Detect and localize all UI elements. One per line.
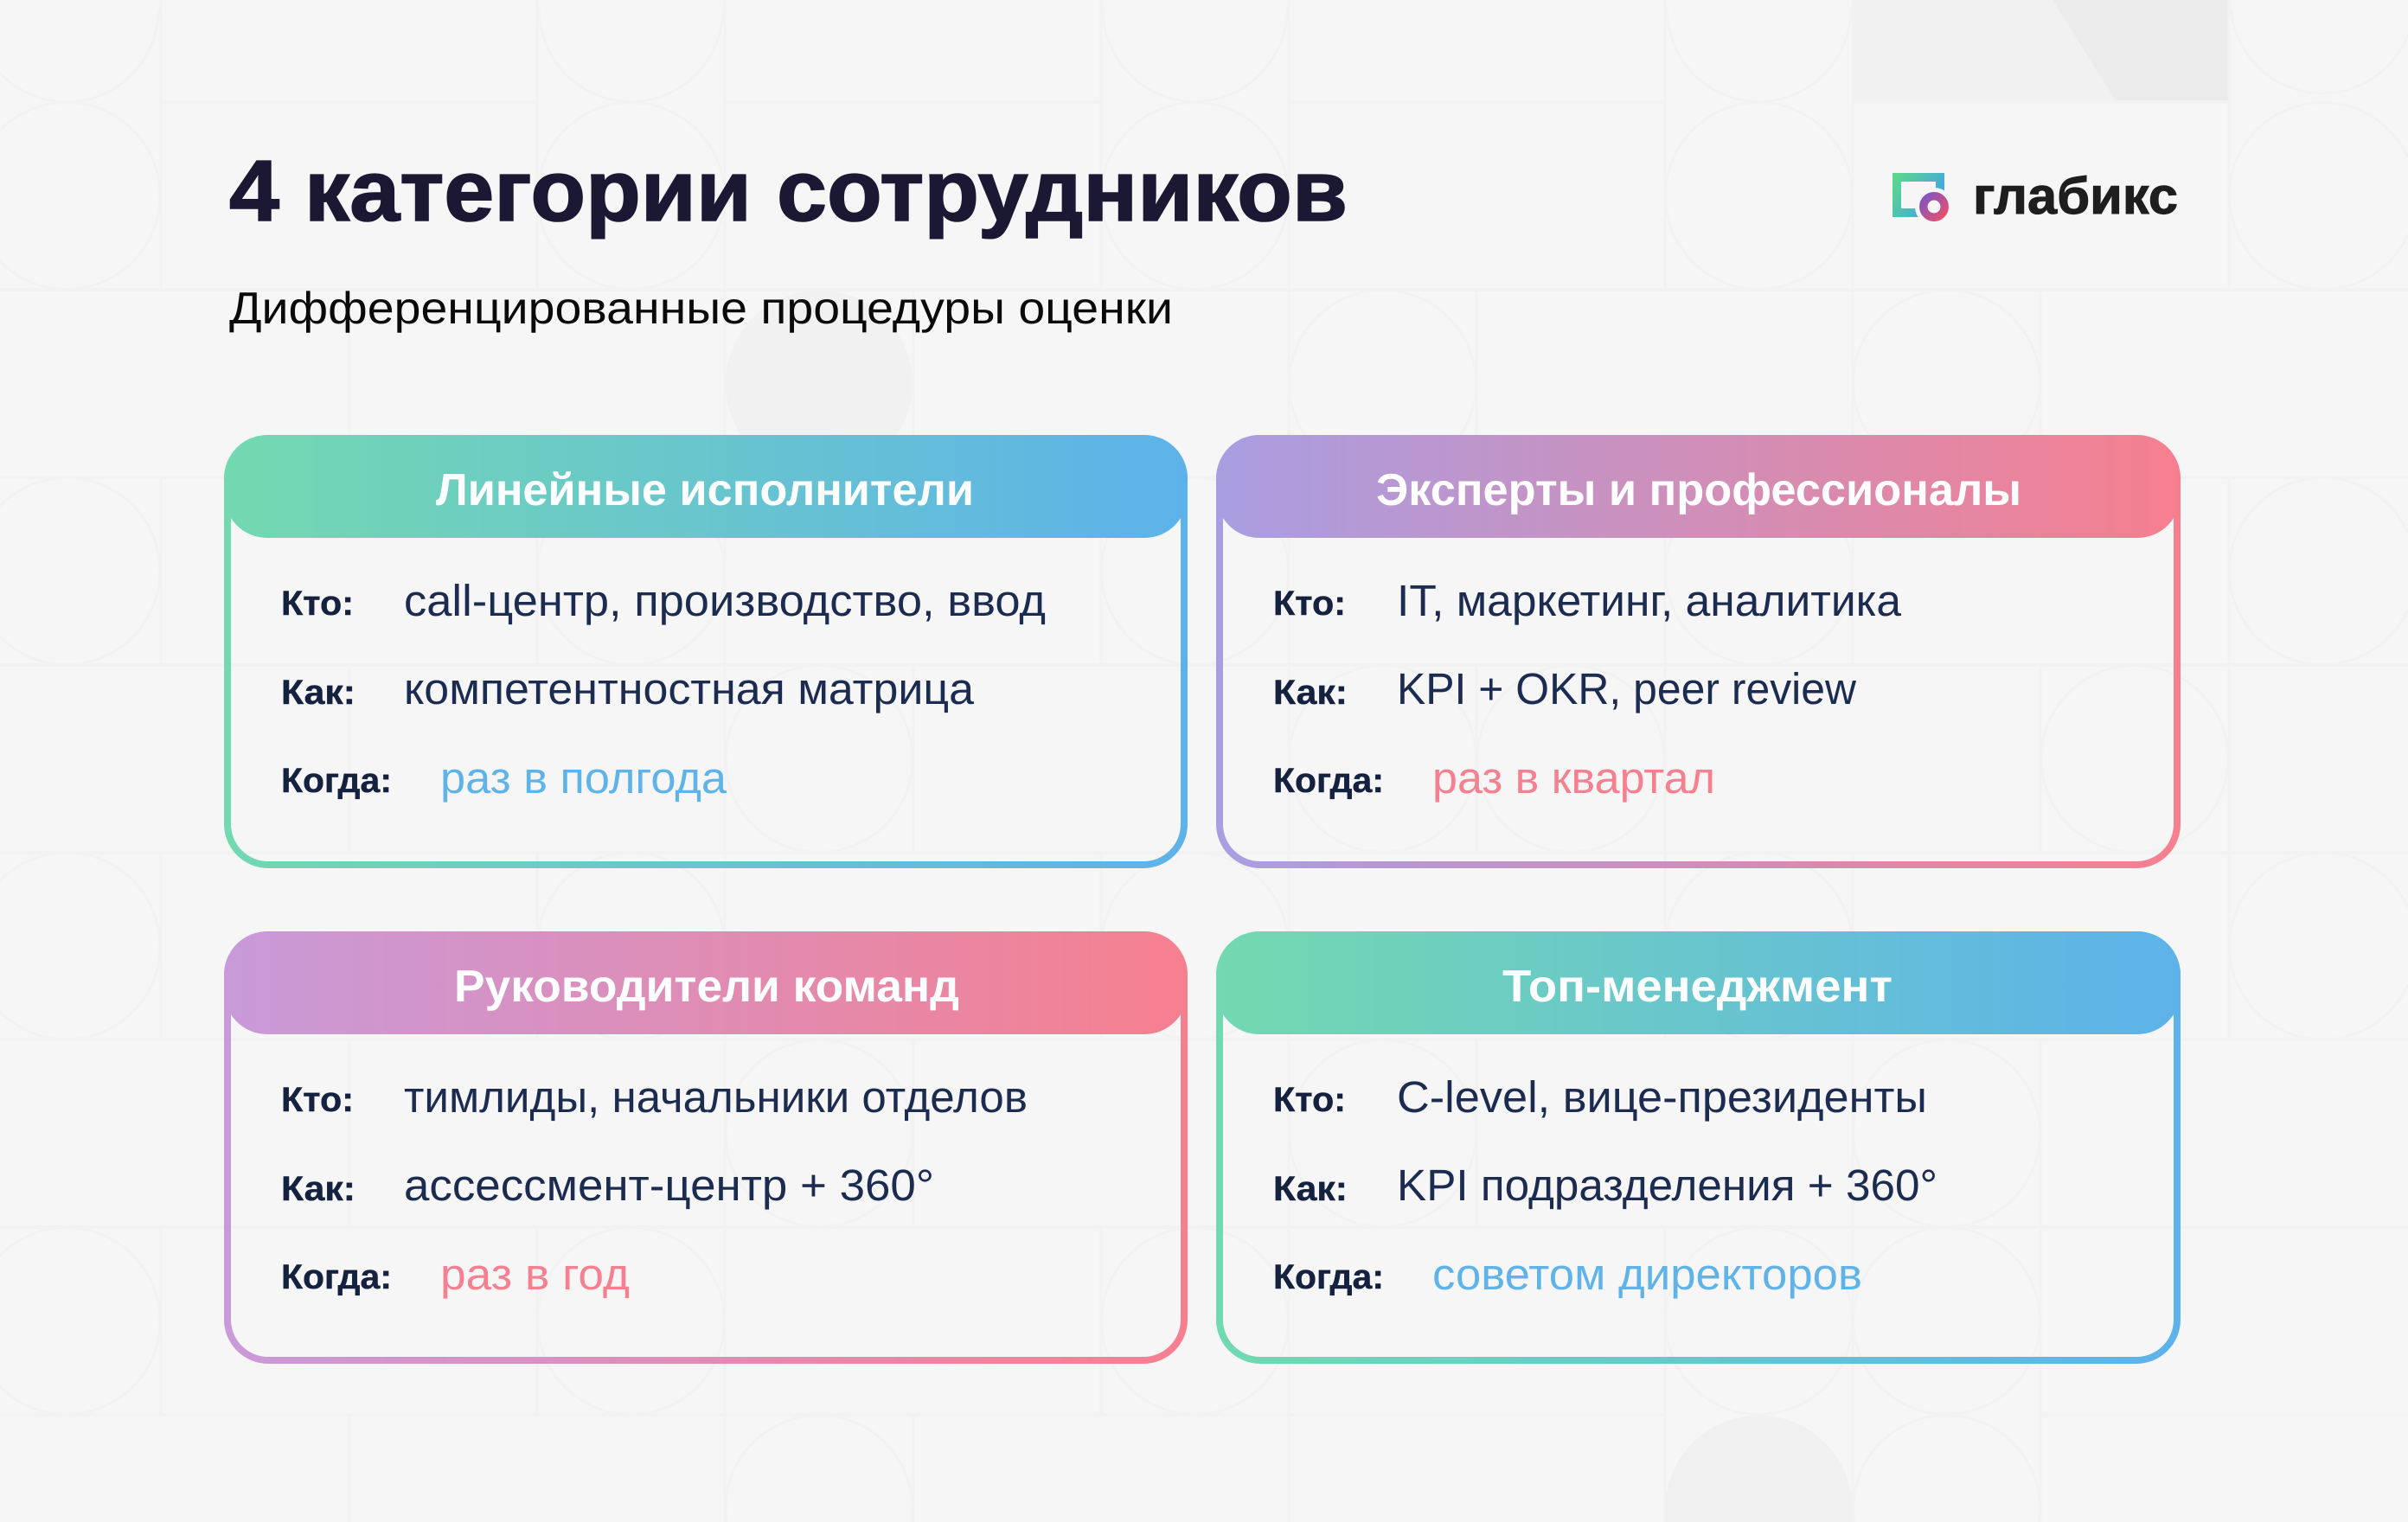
row: когда: раз в год xyxy=(440,1250,630,1299)
row: когда: Когда: xyxy=(1273,1258,1384,1296)
card header xyxy=(1216,931,2181,1034)
card header: Руководители команд xyxy=(454,962,959,1012)
row: когда: Когда: xyxy=(1273,762,1384,800)
row: когда xyxy=(1273,753,1715,803)
card header xyxy=(224,435,1188,538)
row: кто: call-центр, производство, ввод xyxy=(404,576,1046,625)
row: как: ассессмент-центр + 360° xyxy=(404,1161,934,1210)
card header xyxy=(224,931,1188,1034)
card border xyxy=(227,438,1184,865)
row: когда: советом директоров xyxy=(1432,1250,1862,1299)
icon: logo mark xyxy=(1897,177,1953,226)
logo wordmark: глабикс xyxy=(1973,167,2178,225)
row: кто: IT, маркетинг, аналитика xyxy=(1397,576,1902,625)
card header: Топ-менеджмент xyxy=(1502,962,1892,1012)
row: как: компетентностная матрица xyxy=(404,664,975,713)
card header: Эксперты и профессионалы xyxy=(1376,465,2021,515)
row: кто: Кто: xyxy=(1273,1081,1346,1119)
row: как: KPI + OKR, peer review xyxy=(1397,664,1856,713)
row: как: Как: xyxy=(281,674,355,712)
card border xyxy=(1220,438,2177,865)
card border xyxy=(227,935,1184,1360)
row: как: Как: xyxy=(281,1170,355,1208)
logo xyxy=(1897,167,2178,226)
card header: Линейные исполнители xyxy=(436,465,974,515)
row: когда: раз в полгода xyxy=(440,753,727,803)
card header xyxy=(1216,435,2181,538)
card border xyxy=(1220,935,2177,1360)
row: как: Как: xyxy=(1273,1170,1348,1208)
row: когда: Когда: xyxy=(281,1258,392,1296)
panel: Линейные исполнители xyxy=(224,435,1188,865)
row: как: KPI подразделения + 360° xyxy=(1397,1161,1937,1210)
row: как: Как: xyxy=(1273,674,1348,712)
panel: Руководители команд xyxy=(224,931,1188,1360)
row: кто: Кто: xyxy=(1273,585,1346,623)
row: когда xyxy=(281,753,727,803)
row: когда: раз в квартал xyxy=(1432,753,1715,803)
panel: Топ-менеджмент xyxy=(1216,931,2181,1360)
row: кто: тимлиды, начальники отделов xyxy=(404,1072,1028,1122)
row: когда: Когда: xyxy=(281,762,392,800)
row: кто: Кто: xyxy=(281,1081,354,1119)
title: 4 категории сотрудников xyxy=(229,143,1348,240)
subtitle: Дифференцированные процедуры оценки xyxy=(229,284,1173,334)
row: кто: Кто: xyxy=(281,585,354,623)
panel: Эксперты и профессионалы xyxy=(1216,435,2181,865)
row: когда xyxy=(281,1250,630,1299)
row: кто: C-level, вице-президенты xyxy=(1397,1072,1927,1122)
